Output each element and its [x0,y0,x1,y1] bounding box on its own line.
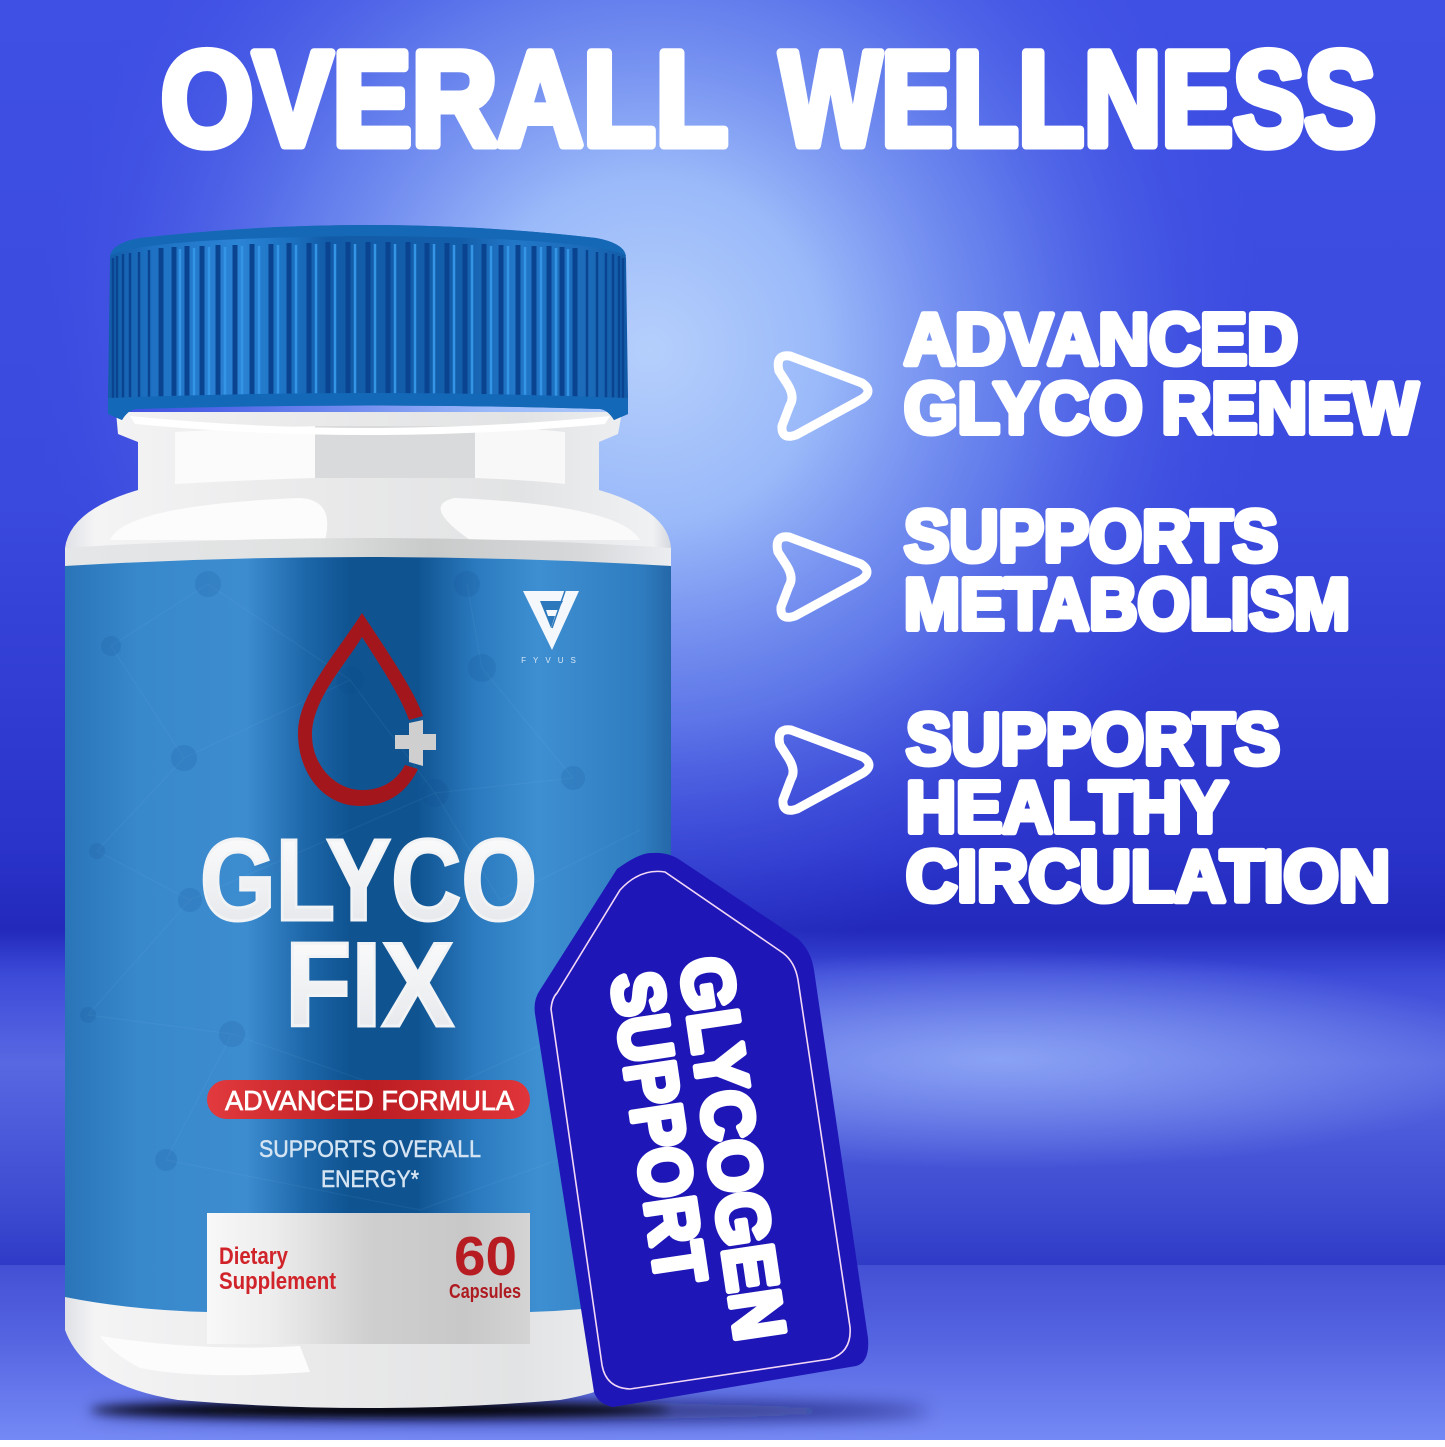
glycogen support tag [535,853,868,1407]
text: supports metabolism: SUPPORTS [904,497,1278,577]
bullet: supports metabolism [777,497,1350,645]
cap rim [110,225,626,256]
white info panel: Supplement [219,1268,336,1295]
text: advanced glyco renew [904,300,1418,449]
text: supports healthy circulation: CIRCULATION [906,837,1390,917]
text: supports metabolism [904,497,1350,645]
icon: arrow outline 3 [779,730,869,810]
icon: arrow outline 1 [778,356,868,436]
supplement bottle [65,225,671,1408]
text: supports healthy circulation: SUPPORTS [906,700,1280,780]
tag text: GLYCOGEN [664,952,800,1345]
bullet: supports healthy circulation [779,700,1390,917]
white info panel: 60 [454,1225,517,1287]
white info panel: Capsules [449,1281,521,1303]
claim text: SUPPORTS OVERALL [259,1136,481,1163]
cap rib highlights [180,244,568,396]
product name: FIX [285,918,454,1052]
bottle cap [108,225,628,420]
bottle shadow [90,1402,930,1420]
label network lines [88,584,640,1210]
cap grooves [113,242,623,402]
text: supports metabolism: METABOLISM [904,565,1350,645]
text: advanced glyco renew: GLYCO RENEW [904,369,1418,449]
bullet: advanced glyco renew [778,300,1418,449]
title: OVERALL [161,25,728,174]
product label [65,557,671,1344]
icon: arrow outline 2 [777,537,867,617]
claim text [259,1136,481,1193]
text: supports healthy circulation: HEALTHY [906,768,1228,848]
product name [200,815,537,1052]
advanced formula badge: ADVANCED FORMULA [225,1085,514,1116]
tag inner outline [551,871,850,1389]
product name: GLYCO [200,815,537,945]
text: supports healthy circulation [906,700,1390,917]
brand logo [521,591,583,665]
tag text [595,952,800,1345]
text: advanced glyco renew: ADVANCED [904,300,1298,380]
neck highlights [65,416,671,566]
tag text: SUPPORT [595,967,721,1289]
bottle base highlights [100,1336,310,1375]
label network dots [80,571,585,1171]
title [161,25,1376,174]
brand logo: FYVUS [521,656,583,665]
claim text: ENERGY* [321,1166,419,1193]
white info panel: Dietary [219,1243,289,1270]
bottle body [65,412,671,1408]
tag body [535,853,868,1407]
white info panel [207,1213,530,1344]
icon: blood drop with plus [298,613,436,806]
